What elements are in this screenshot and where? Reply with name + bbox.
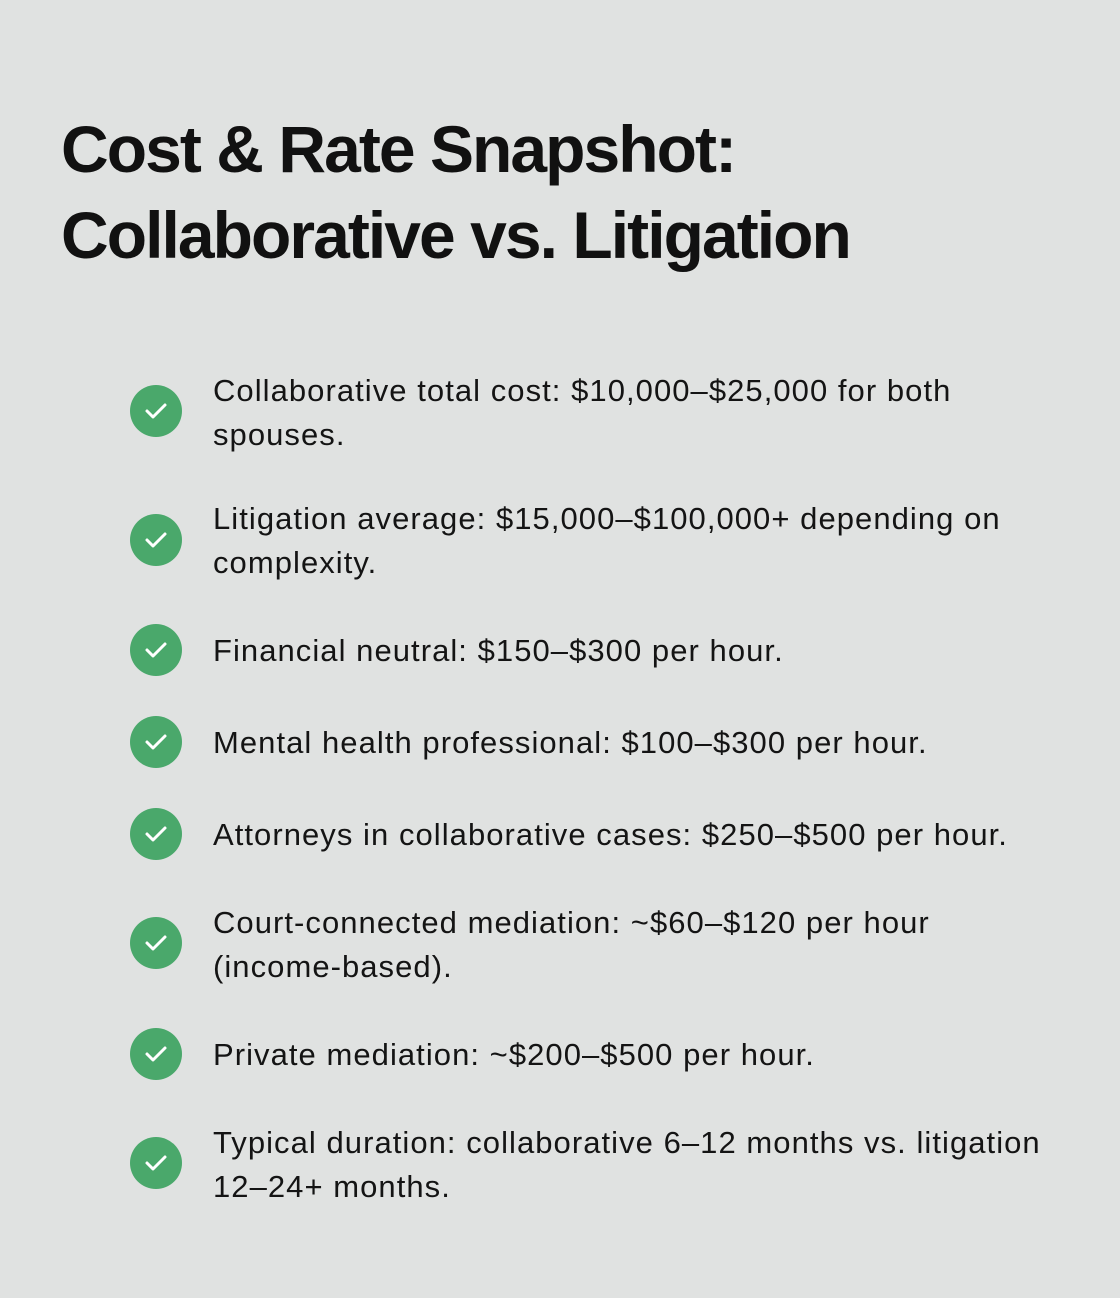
title: Cost & Rate Snapshot: bbox=[61, 112, 735, 186]
text bbox=[213, 501, 1001, 580]
icon: check bbox=[130, 514, 182, 566]
item 7 bbox=[130, 1028, 815, 1080]
item 1 bbox=[130, 373, 951, 452]
text: Court-connected mediation: ~$60–$120 per hour bbox=[213, 905, 930, 940]
item 8 bbox=[130, 1125, 1041, 1204]
icon: check bbox=[130, 1028, 182, 1080]
icon: check bbox=[130, 716, 182, 768]
text: spouses. bbox=[213, 417, 345, 452]
item 2 bbox=[130, 501, 1001, 580]
icon: check bbox=[130, 1137, 182, 1189]
icon: check bbox=[130, 917, 182, 969]
title bbox=[61, 112, 850, 272]
item 3 bbox=[130, 624, 784, 676]
text: Typical duration: collaborative 6–12 months vs. litigation bbox=[213, 1125, 1041, 1160]
title: Collaborative vs. Litigation bbox=[61, 198, 850, 272]
text: Collaborative total cost: $10,000–$25,000 for both bbox=[213, 373, 951, 408]
text: (income-based). bbox=[213, 949, 453, 984]
text: 12–24+ months. bbox=[213, 1169, 451, 1204]
text: Mental health professional: $100–$300 per hour. bbox=[213, 725, 928, 760]
text: Attorneys in collaborative cases: $250–$500 per hour. bbox=[213, 817, 1008, 852]
text bbox=[213, 373, 951, 452]
item 4 bbox=[130, 716, 928, 768]
text: complexity. bbox=[213, 545, 377, 580]
text bbox=[213, 905, 930, 984]
icon: check bbox=[130, 808, 182, 860]
text: Private mediation: ~$200–$500 per hour. bbox=[213, 1037, 815, 1072]
item 5 bbox=[130, 808, 1008, 860]
item 6 bbox=[130, 905, 930, 984]
icon: check bbox=[130, 385, 182, 437]
icon: check bbox=[130, 624, 182, 676]
text: Litigation average: $15,000–$100,000+ depending on bbox=[213, 501, 1001, 536]
text: Financial neutral: $150–$300 per hour. bbox=[213, 633, 784, 668]
text bbox=[213, 1125, 1041, 1204]
